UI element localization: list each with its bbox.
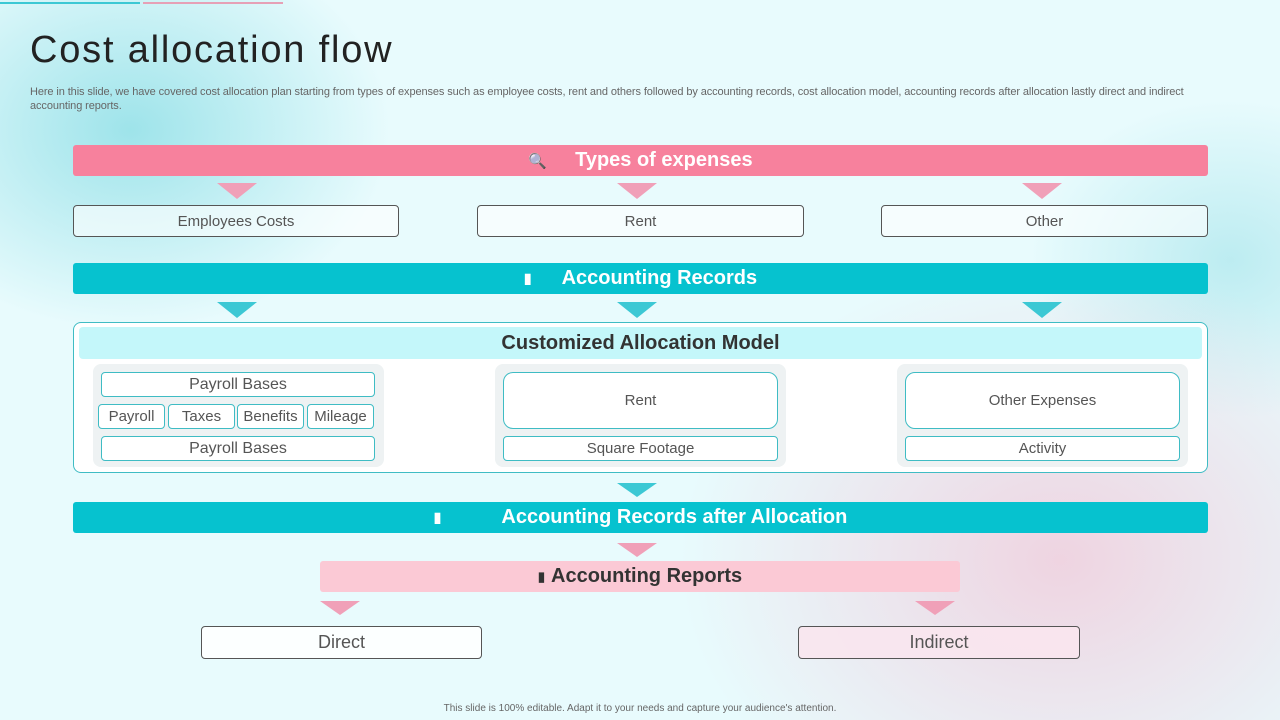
header: Accounting Reports (320, 561, 960, 592)
header: Accounting Reports: ▮ (538, 568, 545, 584)
box: Rent (477, 205, 804, 237)
header: Accounting Records after Allocation: ▮ (434, 509, 441, 525)
title: Cost allocation flow (30, 29, 393, 71)
group: payroll: Payroll Bases (189, 440, 287, 456)
group: rent (495, 364, 786, 467)
header: Accounting Records after Allocation: Accounting Records after Allocation (501, 506, 847, 528)
box: Direct: Direct (318, 632, 365, 652)
arrows: types (217, 183, 1062, 199)
box: Direct (201, 626, 482, 659)
box: Indirect (798, 626, 1080, 659)
box: Employees Costs (73, 205, 399, 237)
arrows: records (217, 302, 1062, 318)
group: rent: Rent (625, 392, 656, 409)
header: Accounting Records: ▮ (524, 270, 532, 286)
header: Accounting Records: Accounting Records (562, 267, 757, 289)
header: Accounting Reports: Accounting Reports (551, 565, 742, 587)
group: payroll (93, 364, 384, 467)
group: payroll: Mileage (314, 408, 367, 425)
box: Rent: Rent (625, 212, 656, 230)
group: other: Activity (1019, 440, 1066, 457)
header: Accounting Records (73, 263, 1208, 294)
box: Employees Costs: Employees Costs (178, 212, 294, 230)
box: Other: Other (1026, 212, 1063, 230)
model heading (79, 327, 1202, 359)
group: rent: Square Footage (587, 440, 694, 457)
arrows: reports (320, 601, 955, 615)
header: Accounting Records after Allocation (73, 502, 1208, 533)
group: payroll: Benefits (243, 408, 298, 425)
footer: This slide is 100% editable. Adapt it to your needs and capture your audience's attention. (444, 703, 836, 714)
group: other (897, 364, 1188, 467)
group: other: Other Expenses (989, 392, 1096, 409)
box: Other (881, 205, 1208, 237)
header: Types of expenses (73, 145, 1208, 176)
arrow: to reports (617, 543, 657, 557)
arrow: to after allocation (617, 483, 657, 497)
group: payroll: Taxes (182, 408, 221, 425)
panel: Customized Allocation Model (73, 322, 1208, 473)
description: Here in this slide, we have covered cost allocation plan starting from types of expenses such as employee costs, rent and others followed by accounting records, cost allocation model, accounting records after allocation lastly direct and indirect accounting reports. (30, 86, 1184, 112)
header: Types of expenses: Types of expenses (575, 149, 753, 171)
model heading: Customized Allocation Model (501, 332, 780, 354)
group: payroll: Payroll (109, 408, 154, 425)
box: Indirect: Indirect (909, 632, 969, 652)
group: payroll: Payroll Bases (189, 376, 287, 392)
top accent lines (0, 2, 140, 4)
header: Types of expenses: 🔍 (528, 152, 547, 170)
